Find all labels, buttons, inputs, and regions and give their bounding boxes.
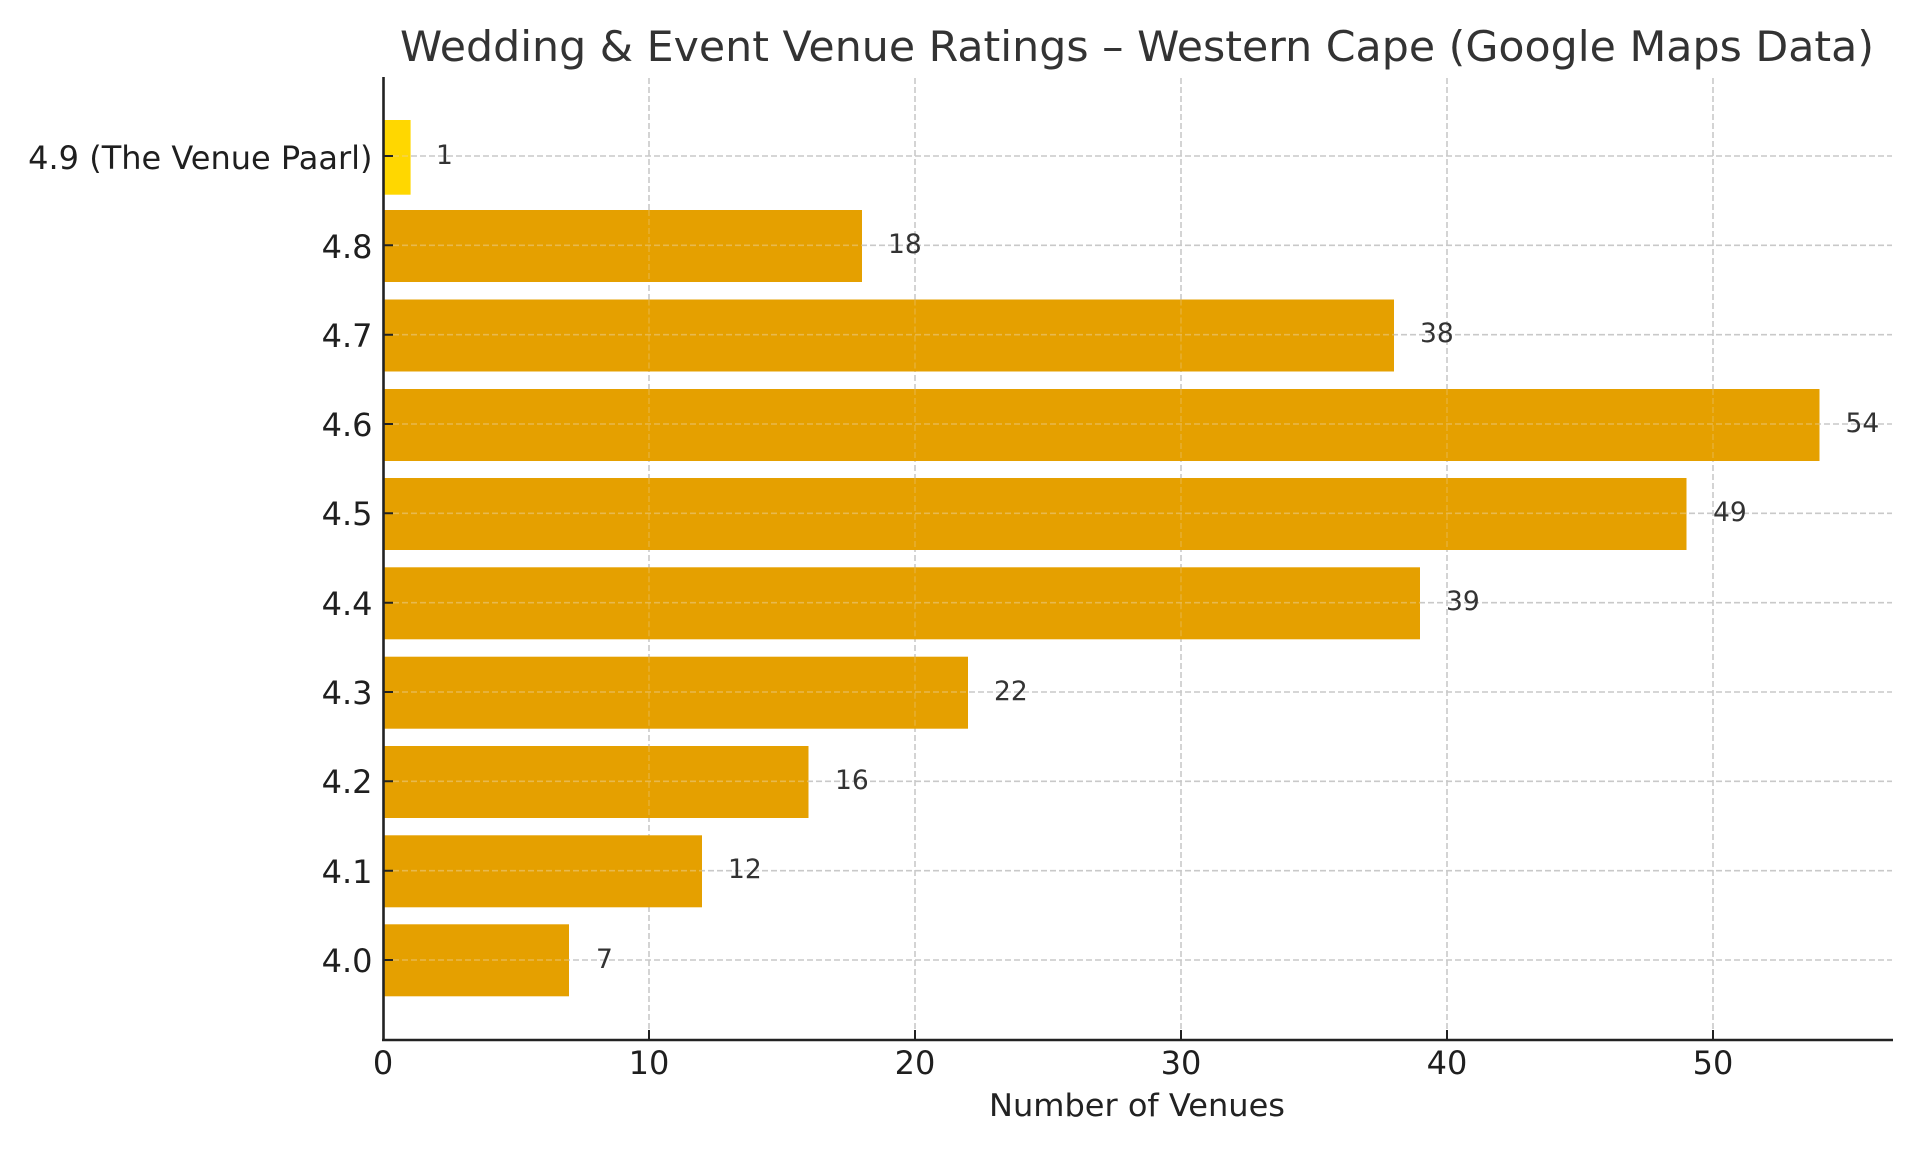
value labels: 16 (835, 765, 869, 796)
x axis labels: 10 (629, 1044, 669, 1082)
bars (384, 120, 1820, 996)
y axis labels: 4.2 (322, 763, 372, 801)
y axis labels: 4.4 (322, 585, 372, 623)
value labels (436, 140, 1879, 975)
x axis labels: 30 (1161, 1044, 1201, 1082)
title: Wedding & Event Venue Ratings – Western Cape (Google Maps Data) (400, 22, 1874, 71)
axes and ticks (382, 77, 1893, 1041)
y axis labels: 4.5 (322, 495, 372, 533)
bar: 4.7 (384, 300, 1394, 372)
x axis labels (373, 1044, 1733, 1082)
value labels: 54 (1846, 408, 1879, 439)
value labels: 12 (728, 854, 762, 885)
y axis labels: 4.6 (322, 406, 372, 444)
y axis labels: 4.1 (322, 853, 372, 891)
y axis labels: 4.8 (322, 228, 372, 266)
value labels: 38 (1420, 318, 1454, 349)
y axis labels: 4.9 (The Venue Paarl) (28, 139, 372, 177)
value labels: 22 (994, 676, 1028, 707)
x axis labels: 0 (373, 1044, 393, 1082)
y axis labels: 4.3 (322, 674, 372, 712)
bar: 4.5 (384, 478, 1686, 550)
x axis labels: 50 (1693, 1044, 1733, 1082)
value labels: 1 (436, 140, 453, 171)
bar: 4.0 (384, 924, 569, 996)
bar: 4.6 (384, 389, 1820, 461)
x axis labels: 40 (1427, 1044, 1467, 1082)
bar: 4.2 (384, 746, 808, 818)
value labels: 7 (596, 944, 613, 975)
bar: 4.8 (384, 210, 862, 282)
x axis labels: 20 (895, 1044, 935, 1082)
x axis title: Number of Venues (989, 1088, 1285, 1124)
value labels: 18 (888, 229, 922, 260)
bar: 4.1 (384, 835, 702, 907)
bar: 4.3 (384, 657, 968, 729)
value labels: 49 (1713, 497, 1747, 528)
bar: 4.4 (384, 567, 1420, 639)
bar: 4.9 The Venue Paarl (384, 120, 411, 195)
value labels: 39 (1446, 586, 1480, 617)
y axis labels: 4.7 (322, 317, 372, 355)
y axis labels (28, 139, 372, 980)
y axis labels: 4.0 (322, 942, 372, 980)
